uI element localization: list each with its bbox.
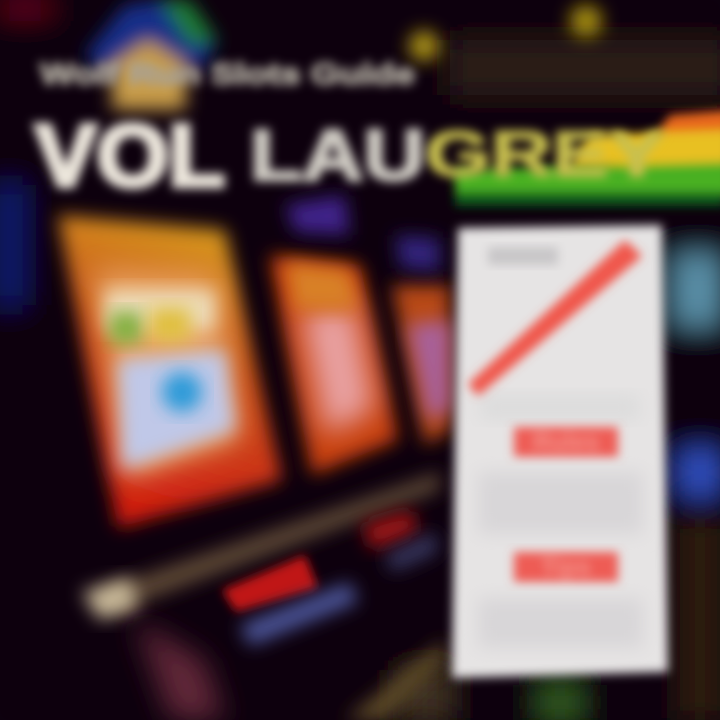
title: Wolf Run Slots Guide <box>40 58 415 91</box>
red label 2: Tips <box>542 554 590 581</box>
paragraph block 2 <box>478 472 643 534</box>
red diagonal slash <box>468 240 642 396</box>
red label 2 <box>514 552 618 582</box>
button panel <box>82 472 445 720</box>
paragraph block 1 <box>480 395 640 420</box>
heading text on paper <box>488 247 558 265</box>
red label 1: Rules <box>533 429 599 456</box>
rainbow stripes <box>455 110 720 206</box>
paper panel <box>452 225 668 678</box>
yellow lights <box>409 5 602 61</box>
title: GREY <box>425 118 665 190</box>
paragraph block 3 <box>478 598 643 648</box>
title: VOL <box>35 106 225 205</box>
red label 1 <box>514 427 618 457</box>
slot machine: screen 2 <box>270 255 398 475</box>
top emblem <box>85 0 218 110</box>
purple tops <box>285 195 440 272</box>
slot machine: screen 3 <box>392 285 450 445</box>
slot machine: screen 1 <box>58 215 282 528</box>
title <box>35 58 665 205</box>
title: LAU <box>250 116 425 196</box>
